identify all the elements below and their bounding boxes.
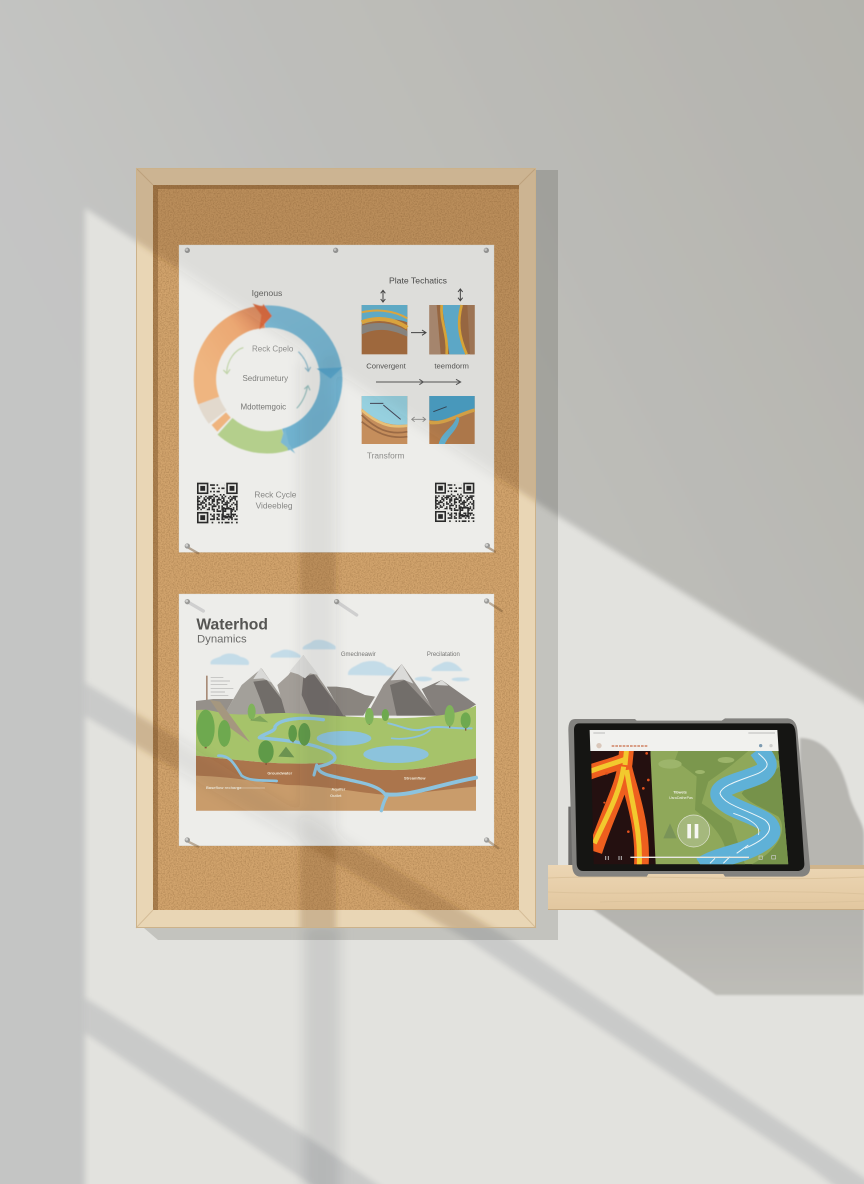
- tablet bezel: [574, 723, 804, 871]
- title: Dynamics: [197, 634, 247, 646]
- poster pins: [185, 248, 495, 553]
- ring centre labels: Sedrumetury: [242, 374, 288, 383]
- soil labels: Streamflow: [404, 776, 426, 781]
- rivers: [218, 718, 476, 811]
- soil labels: Groundwater: [267, 770, 293, 775]
- transform label: Transform: [367, 450, 405, 460]
- tablet case: [568, 718, 810, 877]
- mountains: [196, 655, 476, 718]
- QR caption: Videebleg: [256, 501, 293, 511]
- QR code left: [196, 482, 238, 524]
- shelf top shade: [790, 865, 864, 869]
- soil labels: [206, 770, 426, 798]
- small orange segment: [212, 412, 231, 432]
- blue arrow head right: [317, 367, 342, 379]
- diagram labels upper: Gmeclneawir: [341, 652, 376, 658]
- blue arc: [264, 317, 331, 440]
- shelf board: [548, 865, 864, 910]
- green valley: [196, 706, 476, 770]
- tablet stand: [568, 807, 573, 865]
- tablet: [568, 718, 810, 877]
- beige arc segment: [209, 401, 218, 417]
- thumbnail: convergent: [362, 305, 407, 354]
- title: Waterhod: [196, 616, 268, 633]
- title: [196, 616, 268, 646]
- poster paper: [179, 245, 494, 552]
- thumbnail: lower left: [362, 396, 407, 444]
- soil labels: Outlet: [330, 793, 342, 798]
- lakes: [317, 731, 429, 763]
- video caption: UsraDathePas: [669, 796, 693, 800]
- slope on left: [210, 700, 250, 742]
- plate tectonics heading: Plate Techatics: [389, 275, 448, 285]
- rock cycle ring diagram: [205, 304, 342, 454]
- cork surface: [153, 185, 519, 910]
- green arc: [225, 426, 285, 442]
- poster paper: [179, 594, 494, 846]
- window shadow on second poster: [179, 594, 355, 846]
- ring centre labels: [240, 344, 294, 412]
- igneous label: Igenous: [252, 288, 283, 298]
- ring centre labels: Mdottemgoic: [240, 403, 286, 412]
- soil labels: Baseflow recharge: [206, 785, 242, 790]
- blue arrow head bottom: [281, 428, 295, 454]
- tablet shadow on wall: [800, 738, 864, 870]
- frame outline: [136, 168, 536, 928]
- shelf: [548, 865, 864, 910]
- shelf shadow on wall: [587, 905, 864, 995]
- second boundary label: teemdorm: [434, 362, 469, 371]
- soil labels: Aquifer: [331, 786, 346, 791]
- poster pins: [185, 598, 502, 848]
- poster: watershed dynamics: [179, 594, 502, 848]
- green river panel: [650, 749, 790, 867]
- lava panel: [591, 751, 656, 864]
- window shadow on first poster: [179, 245, 494, 553]
- cork board: [136, 168, 536, 928]
- diagram labels upper: [341, 652, 460, 658]
- clouds: [211, 640, 470, 681]
- long horizontal arrow: [376, 379, 461, 385]
- video caption: [669, 790, 693, 800]
- red arrow head: [253, 304, 272, 330]
- vertical arrows: [381, 289, 463, 302]
- thumbnail: lower right: [429, 396, 475, 444]
- brown soil lower: [196, 776, 476, 811]
- pause button: [678, 815, 710, 847]
- convergent label: Convergent: [366, 362, 407, 371]
- diagram labels upper: Precilatation: [427, 652, 460, 658]
- wooden frame: [136, 168, 536, 928]
- board shadow on wall: [144, 170, 558, 940]
- inner cycle arrows: [223, 348, 311, 408]
- frame and cork window shadows: [137, 169, 535, 927]
- shelf wood grain: [548, 877, 864, 902]
- brown soil upper: [196, 756, 476, 811]
- video control bar: [606, 856, 776, 860]
- small double arrow: [412, 417, 426, 422]
- QR caption: [254, 489, 297, 511]
- gauge with notes: [206, 676, 233, 702]
- ring centre labels: Reck Cpelo: [252, 344, 294, 353]
- QR caption: Reck Cycle: [254, 489, 297, 499]
- poster: rock cycle and plate tectonics: [179, 245, 495, 553]
- frame mitre edges: [136, 168, 536, 928]
- orange igneous arc: [205, 317, 264, 401]
- display header bar: [590, 730, 779, 751]
- thumbnail: transform boundary: [429, 305, 475, 354]
- video caption: Tibwets: [673, 790, 687, 794]
- QR code right: [434, 482, 475, 523]
- trees: [197, 704, 471, 765]
- arrow between top thumbnails: [411, 330, 426, 335]
